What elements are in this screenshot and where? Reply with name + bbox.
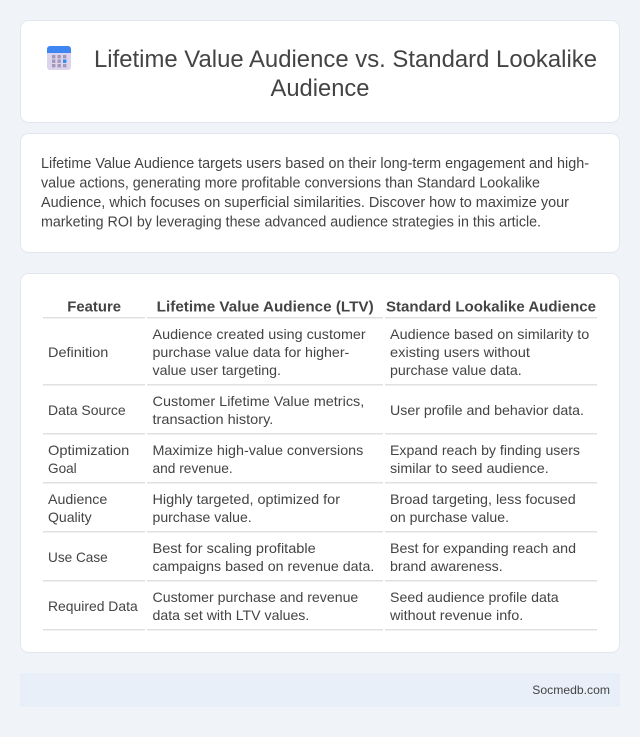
title: Lifetime Value Audience vs. Standard Lookalike	[94, 46, 597, 73]
text block: introduction: Audience, which focuses on superficial similarities. Discover how to maximize your	[41, 195, 569, 211]
table row: Definition: purchase value data for higher-	[152, 344, 350, 360]
table row: Data Source: User profile and behavior data.	[390, 402, 584, 418]
table row: Definition: value user targeting.	[152, 362, 281, 378]
table row: Optimization Goal: Optimization	[48, 442, 129, 458]
title	[94, 46, 597, 102]
table row: Use Case: campaigns based on revenue data.	[152, 558, 374, 574]
table row: Use Case: brand awareness.	[390, 558, 503, 574]
table header row	[67, 298, 596, 316]
table header row: Standard Lookalike Audience	[386, 298, 596, 316]
table header row: Lifetime Value Audience (LTV)	[157, 298, 374, 316]
text block: introduction: marketing ROI by leveraging these advanced audience strategies in this article.	[41, 214, 541, 230]
text block: introduction: value actions, generating more profitable conversions than Standard Lookalike	[41, 176, 540, 192]
table row: Definition: Audience based on similarity to	[390, 326, 590, 342]
table row: Optimization Goal: Goal	[48, 460, 77, 476]
table row: Use Case: Use Case	[48, 549, 108, 565]
table row: Data Source: Data Source	[48, 402, 126, 418]
table row: Audience Quality: Broad targeting, less focused	[390, 491, 576, 507]
table row: Definition: Definition	[48, 344, 108, 360]
table row: Use Case	[48, 540, 576, 574]
table row: Definition: purchase value data.	[390, 362, 522, 378]
table row: Use Case: Best for scaling profitable	[152, 540, 316, 556]
table row: Audience Quality: Quality	[48, 509, 92, 525]
table row: Required Data: without revenue info.	[389, 607, 523, 623]
table row: Data Source: Customer Lifetime Value metrics,	[152, 393, 364, 409]
table row: Audience Quality: Highly targeted, optimized for	[152, 491, 340, 507]
panel: title card	[20, 20, 620, 122]
icon: calendar	[47, 46, 71, 70]
panel: comparison table	[20, 274, 620, 652]
table row: Optimization Goal: similar to seed audience.	[390, 460, 549, 476]
table row: Required Data	[48, 589, 559, 623]
table row: Optimization Goal: Maximize high-value conversions	[152, 442, 363, 458]
footer credit: Socmedb.com	[532, 683, 610, 697]
table row: Use Case: Best for expanding reach and	[390, 540, 576, 556]
text block: introduction	[41, 156, 589, 230]
table row: Audience Quality: on purchase value.	[390, 509, 509, 525]
table row: Optimization Goal: and revenue.	[152, 460, 233, 476]
table row: Data Source: transaction history.	[152, 411, 273, 427]
table row: Audience Quality	[48, 491, 576, 525]
table row: Required Data: data set with LTV values.	[152, 607, 309, 623]
table row: Definition: existing users without	[390, 344, 530, 360]
table row: Required Data: Seed audience profile data	[390, 589, 559, 605]
table row: Audience Quality: Audience	[48, 491, 108, 507]
text block: introduction: Lifetime Value Audience targets users based on their long-term engagement and high-	[41, 156, 589, 172]
panel: introduction	[20, 134, 620, 252]
table row: Required Data: Customer purchase and revenue	[152, 589, 359, 605]
table row: Required Data: Required Data	[48, 598, 138, 614]
title: Audience	[270, 75, 370, 102]
table row: Optimization Goal	[48, 442, 580, 476]
table row: Audience Quality: purchase value.	[152, 509, 252, 525]
table row: Definition: Audience created using customer	[152, 326, 366, 342]
table header row: Feature	[67, 298, 121, 316]
footer bar	[20, 673, 620, 707]
table row: Data Source	[48, 393, 584, 427]
table row: Optimization Goal: Expand reach by finding users	[390, 442, 580, 458]
table row: Definition	[48, 326, 590, 378]
